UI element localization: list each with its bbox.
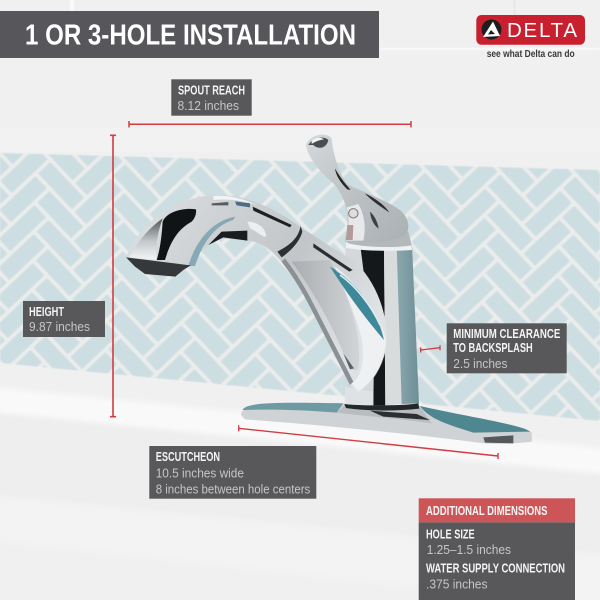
escutcheon callout [149,446,316,499]
background: wall highlights [0,0,600,152]
spout [126,195,387,392]
water supply connection: .375 inches [426,576,488,591]
title banner [0,11,379,58]
minimum clearance callout [447,323,567,373]
spout reach callout: SPOUT REACH [178,84,245,98]
spout reflections [129,196,354,369]
faucet body column [345,245,419,405]
escutcheon callout: 10.5 inches wide [156,465,244,480]
clearance dimension line [421,345,440,352]
minimum clearance callout: 2.5 inches [453,356,508,371]
spout reach dimension line [129,121,411,128]
hole size: 1.25–1.5 inches [427,542,511,557]
faucet handle [306,135,408,243]
height dimension line [110,135,116,417]
additional dimensions panel [419,498,575,600]
background: herringbone tile backsplash [0,153,600,421]
water supply connection [426,561,565,591]
panel header [419,498,575,522]
handle highlights and shadows [308,138,412,251]
Delta logo: DELTA [507,19,577,42]
height callout: HEIGHT [29,305,64,319]
spray head [126,257,191,277]
spout reach callout: 8.12 inches [178,98,239,113]
Delta logo: see what Delta can do [487,49,575,60]
escutcheon callout: ESCUTCHEON [156,450,220,464]
minimum clearance callout: MINIMUM CLEARANCE [453,327,560,341]
minimum clearance callout: TO BACKSPLASH [453,341,533,355]
spout reach callout [171,79,252,116]
background: upper wall [0,0,600,175]
spout white lower surface [335,267,386,392]
icon: delta emblem [482,20,502,40]
Delta logo [476,15,585,60]
faucet base ring [344,403,419,411]
height callout [23,301,105,337]
background: counter [0,355,600,600]
title banner: 1 OR 3-HOLE INSTALLATION [25,19,356,51]
escutcheon dimension line [239,425,498,459]
handle collar [346,232,412,248]
escutcheon callout: 8 inches between hole centers [156,481,311,496]
panel header: ADDITIONAL DIMENSIONS [426,504,548,518]
escutcheon plate [241,403,532,444]
spout lower edge shading [282,258,353,385]
spout grey inner surface [292,260,359,370]
faucet [126,135,419,411]
hole size [426,527,511,557]
height callout: 9.87 inches [29,319,90,334]
hole size: HOLE SIZE [426,527,475,541]
spout teal reflection [330,267,384,340]
